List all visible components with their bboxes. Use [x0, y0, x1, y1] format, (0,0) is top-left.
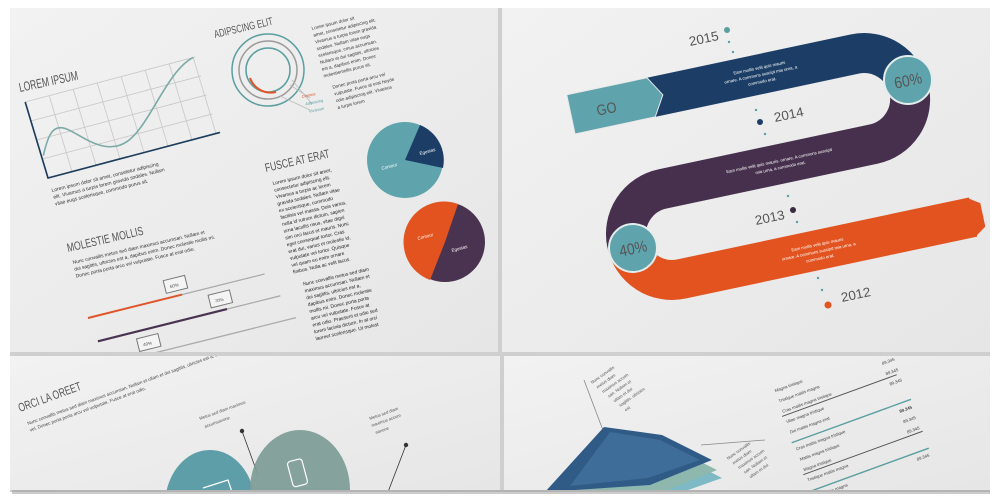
text column: Nunc convallis metus sed diam: [303, 267, 370, 288]
text: chart caption: Lorem ipsum dolor sit amet, consetetur adipiscing: [51, 161, 159, 194]
text: molestie: Nunc convallis metus sed diam maximus accumsan. Nullam et: [72, 230, 206, 266]
ribbon: purple: [608, 90, 928, 244]
price list: Tristique mattis magna: [778, 384, 821, 404]
price list: Mattis magna tristique: [799, 443, 841, 462]
pie chart: teal/navy: Contour: [381, 162, 398, 171]
panel: bottom-right book & price list: [504, 356, 990, 490]
text: book side: maximus accum: [737, 448, 766, 470]
text column: consectetur adipiscing elit.: [274, 175, 331, 194]
year labels: 2014: [773, 104, 805, 125]
text column: arcu vel vulputate. Fusce at: [310, 302, 371, 322]
line chart: [25, 56, 220, 178]
text: book callout: [590, 366, 645, 411]
price list: Dui mattis magna erat: [789, 415, 831, 435]
ribbon texts: Eam mollis velit quis mauris. ornare, A commons suscipit: [726, 147, 833, 174]
year labels: 2013: [754, 207, 786, 228]
text column: gravida sodales. Nullam vitae: [277, 187, 341, 207]
text column: ex scelerisque, commodo: [278, 196, 334, 214]
icon: laptop: [203, 480, 232, 492]
icon: phone: [287, 458, 308, 487]
GO box: [567, 75, 667, 134]
price list: 89.345: [906, 425, 921, 435]
text block: right: amet, consetetur adipiscing elit.: [313, 17, 376, 38]
price list: 89.345: [902, 415, 917, 424]
progress bars: 40%: [143, 340, 153, 347]
price list: 89.345: [885, 367, 900, 376]
S-shaped ribbon: GO: [595, 99, 618, 120]
book stack: [546, 427, 722, 490]
text: molestie: dui sagittis, ultricies est a, dapibus enim. Donec molestie mollis mi.: [74, 234, 216, 273]
callout labels: maximus accum: [371, 412, 402, 428]
text: book side: Nunc convallis: [726, 441, 751, 461]
badge: 40%: [609, 224, 657, 272]
ribbon: orange: [627, 172, 973, 289]
text column: vel quam eu enim ornare: [291, 251, 345, 269]
text block: right: molestiemollis purus sit.: [323, 62, 371, 79]
badge: 60%: [884, 56, 932, 104]
text column: dapibus enim. Donec molestie: [307, 287, 373, 308]
text block: right: a turpis lorem: [337, 98, 365, 110]
price list: 89.345: [881, 357, 896, 366]
text column: sim orci lacus et mauris. Nunc: [285, 221, 350, 242]
text block: right: [312, 16, 394, 109]
ribbon texts: Eam mollis velit quis mauris: [791, 237, 844, 252]
callout labels: Metus sed diam: [369, 406, 399, 421]
venn circles: [166, 450, 250, 490]
ribbon texts: mia urna, a commodo erat.: [755, 160, 806, 175]
price list: Tristique mattis magna: [807, 463, 850, 482]
text: book callout: Nunc convallis: [590, 365, 615, 385]
panel: top-left charts: [10, 8, 498, 367]
text column: urna lacullis risus, vitae digni: [283, 215, 345, 235]
price list: Magna tristique: [803, 457, 833, 472]
badge: 40%: 40%: [618, 238, 649, 261]
price list: 89.345: [877, 346, 892, 356]
text column: lorem lacinia dictum. In at orci: [314, 315, 378, 335]
heading: fusce at erat: FUSCE AT ERAT: [264, 146, 331, 175]
text: orci: vel. Donec porta porta arcu vel vulputate. Fusce at erat odio.: [29, 386, 146, 433]
timeline dots: [724, 27, 832, 308]
text column: erat odio. Praesent et odio sed: [312, 308, 379, 329]
text column: eget consequat tortor. Cras: [286, 229, 346, 248]
ribbon texts: commodo erat.: [806, 253, 835, 264]
text column: facilisis vel massa. Duis varius,: [280, 200, 347, 221]
callout labels: [199, 400, 402, 435]
heading: molestie mollis: MOLESTIE MOLLIS: [66, 224, 145, 255]
text: book side: [726, 442, 768, 478]
year labels: 2015: [688, 28, 720, 49]
ribbon texts: ornare. A commons suscipt mia urna, a: [724, 64, 798, 85]
legend: Vivamus: [308, 106, 324, 114]
text block: right: odio.adipiscing elit. Vivamus: [335, 84, 393, 103]
ribbon: navy: [648, 33, 914, 117]
callout labels: Metus sed diam maximus: [199, 400, 246, 421]
text: book callout: metus diam: [595, 372, 617, 389]
legend: [302, 93, 324, 113]
price list: Magna tristique: [774, 378, 804, 393]
S-shaped ribbon: [567, 33, 986, 300]
text: book side: san. Nullam et: [743, 454, 769, 475]
text column: mollis mi. Donec porta porta: [309, 295, 370, 315]
text: book side: ullam et dui: [748, 462, 769, 479]
chart: concentric rings: [232, 34, 312, 110]
text block: right: Vivamus a turpis lorem gravida: [314, 24, 377, 45]
text column: maximus accumsan. Nullam et: [304, 274, 371, 295]
price list: Cras mattis magna: [813, 482, 849, 499]
pie chart: orange/purple: Egestas: [451, 244, 469, 253]
text column: erat dui, varius et molestie id,: [288, 235, 351, 255]
text: book side: metus diam: [731, 448, 753, 465]
text: orci: Nunc convallis metus sed diam maximus accumsan. Nullam et ullam et dui sagittis, ultricies est a, dui sagittis: [27, 345, 237, 426]
text column: laoreet scelerisque. Ut molest: [315, 322, 380, 342]
text column: Vivamus a turpis ac lorem: [275, 182, 331, 201]
panel: bottom-left venn: [10, 356, 500, 490]
badge: 60%: 60%: [893, 70, 924, 93]
text column: nulla id rutrum dictum, sapien: [282, 208, 345, 228]
ribbon texts: ornare. A commons suscipit mia urna, a: [781, 241, 857, 262]
legend: Adipiscing: [305, 98, 324, 106]
progress bars: 70%: [214, 297, 224, 304]
pie chart: teal/navy: [367, 122, 444, 198]
ribbon texts: [724, 61, 856, 262]
text column: vulputate vel tortor. Quisque: [289, 242, 350, 262]
pie chart: orange/purple: Contour: [417, 232, 434, 241]
ribbon texts: commodo erat.: [748, 76, 777, 87]
progress bars: 60%: [169, 282, 179, 289]
text: book callout: san. Nullam et: [607, 378, 633, 399]
heading: adipiscing elit: ADIPSCING ELIT: [213, 16, 274, 41]
text column: [272, 164, 382, 344]
pie chart: teal/navy: Egestas: [419, 147, 437, 156]
text block: right: Donec porta porta arcu vel: [332, 72, 386, 90]
callout labels: accumsanone: [204, 415, 231, 429]
price list: Cras mattis magna tristique: [795, 429, 847, 451]
text: molestie: Donec porta porta arcu vel vulputate. Fusce at erat odio.: [75, 246, 196, 280]
heading: orci la oreet: ORCI LA OREET: [16, 379, 83, 415]
text: chart caption: vitae eugs scelerisque, commodo purus sit.: [54, 179, 149, 208]
text column: finibus. Nulla ac velit lacus.: [293, 257, 351, 276]
text: book callout: maximus accum: [601, 372, 630, 394]
ribbon texts: Eam mollis velit quis mauris: [733, 60, 786, 76]
text: book callout: ullam et dui: [612, 386, 633, 403]
text block: right: sodales. Nullam vitae eugs: [316, 33, 371, 51]
price list: Cras mattis magna tristique: [782, 391, 833, 414]
year labels: [688, 28, 872, 305]
price list: 89.345: [916, 452, 931, 462]
callout lines: [242, 431, 406, 492]
price list: Vitae magna tristique: [785, 406, 825, 424]
text column: Lorem ipsum dolor sit amet,: [272, 168, 332, 187]
price list: 89.345: [899, 404, 913, 414]
text block: right: Nullam et dui sagittis, ultricies: [319, 45, 380, 65]
panel: top-right timeline: [502, 8, 990, 352]
callout labels: sanone: [375, 425, 390, 435]
text: chart caption: elit. Vivamus a turpis lorem gravida sodales. Nullam: [53, 167, 165, 201]
price list: [774, 358, 930, 490]
text block: right: vulputate. Fusce at erat heyde: [334, 77, 395, 96]
legend: Contour: [301, 91, 317, 99]
text: book callout: sagittis. ultricies: [618, 386, 646, 408]
text column: dui sagittis, ultricies est a,: [306, 283, 361, 301]
heading: lorem ipsum: LOREM IPSUM: [18, 68, 79, 95]
text: book callout: est: [624, 404, 632, 412]
pie chart: orange/purple: [404, 202, 485, 282]
price list: 89.345: [889, 377, 903, 387]
text block: right: est a, dapibus enim. Donec: [321, 53, 377, 72]
text block: right: scelerisque, cmus accumsan.: [318, 39, 377, 58]
text block: right: Lorem ipsum dolor sit: [311, 15, 356, 31]
progress bars: [88, 273, 296, 352]
year labels: 2012: [840, 284, 872, 305]
